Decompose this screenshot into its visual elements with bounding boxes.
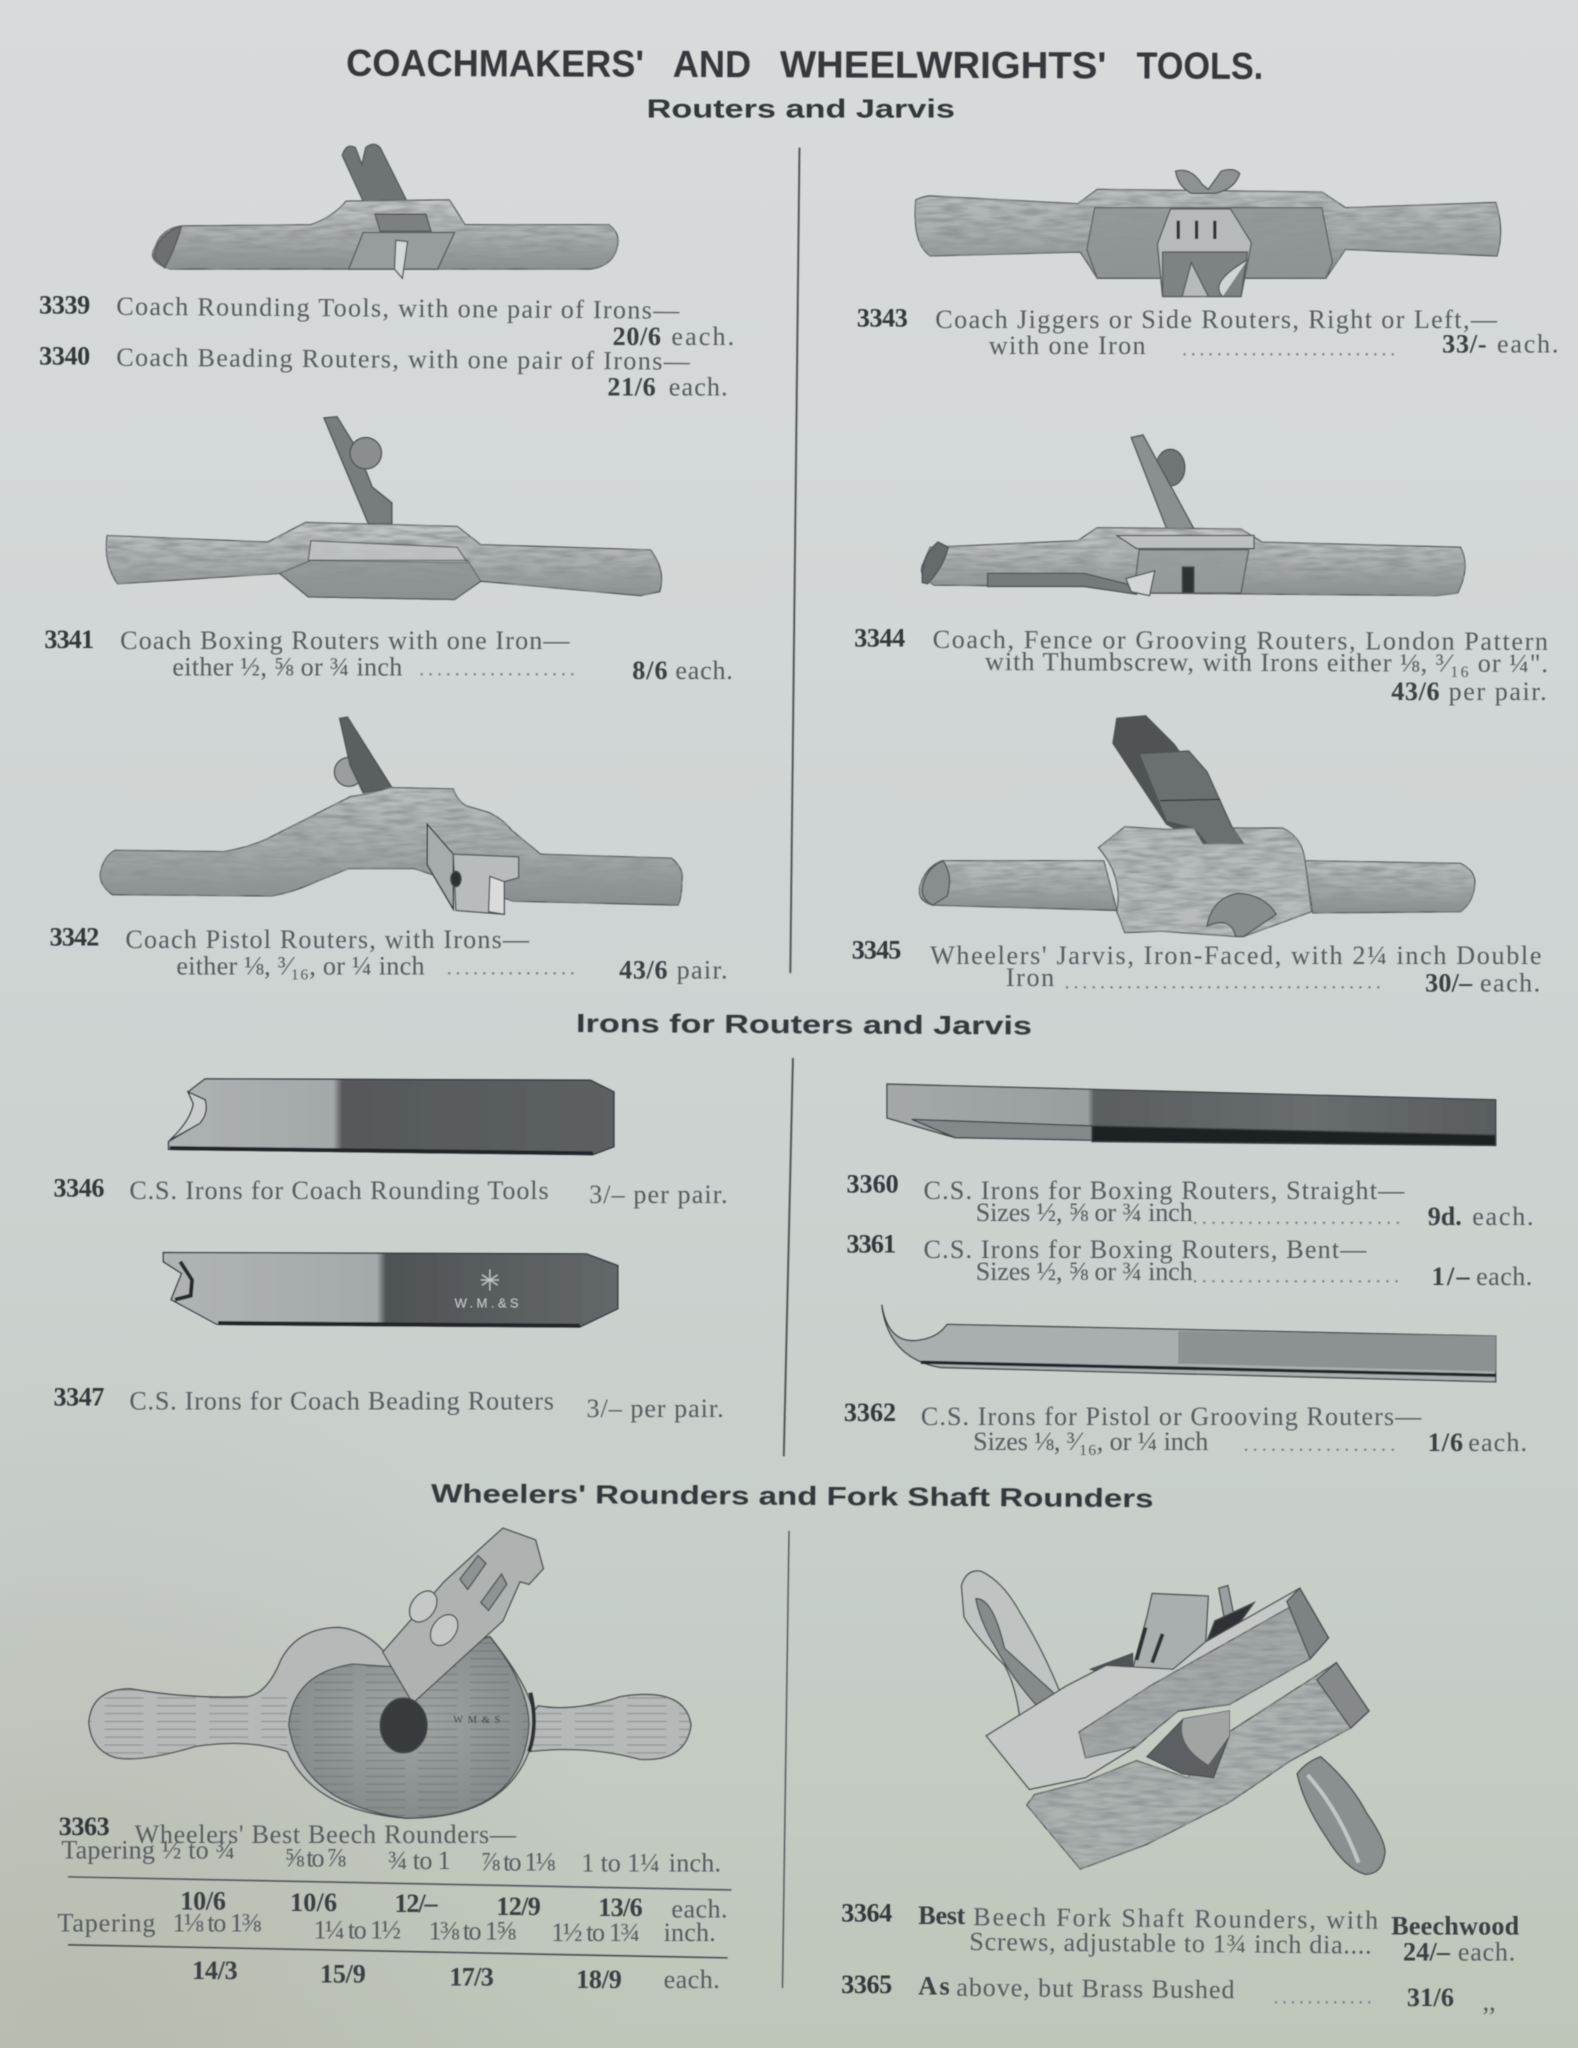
text: 3343: Coach Jiggers or Side Routers, Right or Left,— (935, 305, 1498, 334)
text: 3344: 3344 (854, 624, 905, 653)
text: 3347: 3347 (54, 1382, 105, 1411)
title: AND (673, 44, 751, 86)
panel: routers right column (852, 170, 1558, 997)
illustration: iron 3346 (169, 1079, 614, 1155)
text: 3363 price table: 1 to 1¼ (581, 1849, 660, 1878)
text: 3339: Coach Rounding Tools, with one pair of Irons— (116, 292, 680, 325)
text: 3340: 3340 (39, 341, 90, 370)
text: 3340 (39, 341, 728, 402)
text: 3346: 3346 (54, 1173, 105, 1202)
text: 3347 (54, 1382, 724, 1423)
text: 3341 (44, 625, 733, 685)
illustration: iron 3347: W.M.&S (455, 1295, 519, 1310)
text: 3364: Screws, adjustable to 1¾ inch dia.... (969, 1927, 1372, 1960)
text: 3363 price table: inch. (664, 1918, 716, 1947)
text: 3363 price table: Tapering (57, 1909, 155, 1938)
text: 3341: Coach Boxing Routers with one Iron— (120, 626, 570, 655)
text: 3360: 3360 (846, 1169, 899, 1198)
text: 3363 price table: each. (671, 1894, 728, 1923)
text: 3362 (844, 1398, 1527, 1457)
text: 3363 price table: 17/3 (449, 1962, 494, 1991)
text: 3363 price table: ⅝ to ⅞ (285, 1843, 346, 1872)
text: 3343: ......................... (1182, 339, 1395, 360)
text: 3343: 33/- (1442, 330, 1487, 359)
text: 3342: pair. (677, 955, 728, 984)
illustration: coach boxing router (106, 417, 662, 600)
text: 3365: above, but Brass Bushed (956, 1973, 1235, 2004)
text: 3344: with Thumbscrew, with Irons either ⅛, ³⁄₁₆ or ¼". (985, 647, 1548, 678)
heading: irons: Irons for Routers and Jarvis (576, 1008, 1032, 1040)
text: 3361: C.S. Irons for Boxing Routers, Bent— (924, 1235, 1367, 1264)
text: 3365: As (918, 1971, 950, 2000)
text: 3343 (857, 304, 1558, 360)
title (346, 43, 1263, 88)
panel: routers left column (39, 144, 734, 984)
text: 3364: Beechwood (1391, 1911, 1520, 1940)
text: 3363 price table: 15/9 (320, 1960, 366, 1989)
text: 3365: ............ (1274, 1988, 1372, 2009)
text: 3341: 3341 (44, 625, 94, 654)
text: 3361 (846, 1230, 1532, 1291)
text: 3364: 3364 (841, 1898, 892, 1927)
text: 3363 price table: 1⅜ to 1⅝ (428, 1917, 516, 1946)
illustration: fence router (921, 435, 1465, 596)
text: 3342 (50, 923, 728, 984)
text: 3342: Coach Pistol Routers, with Irons— (125, 925, 530, 954)
text: 3360: 9d. (1428, 1202, 1462, 1231)
text: 3344: 43/6 (1391, 677, 1440, 706)
text: 3342: either ⅛, ³⁄₁₆, or ¼ inch (176, 951, 425, 980)
text: 3346: 3/– per pair. (589, 1180, 728, 1209)
illustration: wheelers rounder (89, 1528, 691, 1818)
illustration: wheelers rounder: WM&S (453, 1715, 500, 1726)
text: 3363 price table: each. (664, 1965, 720, 1994)
text: 3361: 3361 (846, 1230, 896, 1259)
panel: irons left column (54, 1079, 728, 1423)
text: 3365: ,, (1483, 1987, 1496, 2016)
text: 3361: each. (1476, 1262, 1532, 1291)
text: 3364: each. (1458, 1937, 1515, 1966)
illustration: fork shaft rounder (961, 1571, 1385, 1874)
text: 3363 price table: 13/6 (598, 1893, 643, 1922)
text: 3345: Iron (1006, 963, 1054, 992)
text: 3363 price table: ¾ to 1 (388, 1846, 451, 1875)
text: 3345: each. (1480, 968, 1540, 997)
text: 3345: 30/– (1425, 968, 1473, 997)
text: 3339: 3339 (39, 290, 90, 319)
text: 3362: C.S. Irons for Pistol or Grooving Routers— (921, 1402, 1422, 1431)
text: 3363 price table: 10/6 (180, 1887, 226, 1916)
text: 3363 price table: 12/– (394, 1889, 439, 1918)
text: 3361: Sizes ½, ⅝ or ¾ inch (976, 1257, 1193, 1286)
text: 3345: .................................... (1065, 973, 1381, 994)
illustration: iron 3347 (163, 1253, 618, 1327)
text: 3339: 20/6 (613, 322, 661, 351)
illustration: iron 3360 (887, 1084, 1496, 1145)
text: 3364: Best (918, 1901, 966, 1930)
text: 3363 price table: 10/6 (290, 1888, 337, 1917)
text: 3362: ................. (1244, 1435, 1395, 1456)
illustration: wheelers jarvis (919, 716, 1475, 936)
text: 3361: ....................... (1193, 1267, 1399, 1288)
text: 3360: C.S. Irons for Boxing Routers, Straight— (924, 1176, 1405, 1205)
text: 3344: per pair. (1449, 677, 1547, 706)
panel: wheelers rounders (57, 1528, 732, 1994)
text: 3364: Beech Fork Shaft Rounders, with (973, 1902, 1378, 1935)
text: 3364 (841, 1898, 1520, 1966)
text: 3363 price table: inch. (669, 1849, 721, 1878)
title: TOOLS. (1136, 46, 1263, 88)
text: 3363 price table: Wheelers' Best Beech Rounders— (135, 1820, 517, 1849)
text: 3363 price table (57, 1812, 732, 1994)
panel: irons right column (844, 1084, 1534, 1457)
text: 3340: Coach Beading Routers, with one pair of Irons— (116, 343, 691, 376)
text: 3346 (54, 1173, 728, 1209)
text: 3362: 1/6 (1428, 1428, 1463, 1457)
text: 3360 (846, 1169, 1534, 1231)
text: 3360: Sizes ½, ⅝ or ¾ inch (976, 1198, 1193, 1227)
text: 3343: each. (1497, 330, 1558, 359)
text: 3345: 3345 (852, 936, 901, 965)
text: 3362: Sizes ⅛, ³⁄₁₆, or ¼ inch (973, 1427, 1208, 1456)
text: 3347: C.S. Irons for Coach Beading Routers (129, 1386, 554, 1415)
heading: rounders: Wheelers' Rounders and Fork Shaft Rounders (431, 1478, 1154, 1513)
text: 3341: 8/6 (632, 656, 668, 685)
text: 3363 price table: 1⅛ to 1⅜ (172, 1909, 262, 1938)
text: 3363 price table: 1¼ to 1½ (314, 1915, 401, 1944)
text: 3342: 43/6 (619, 955, 668, 984)
text: 3364: 24/– (1403, 1937, 1451, 1966)
text: 3365: 3365 (841, 1970, 892, 1999)
title: COACHMAKERS' (346, 43, 644, 86)
text: 3360: ....................... (1193, 1208, 1400, 1229)
text: 3345: Wheelers' Jarvis, Iron-Faced, with 2¼ inch Double (930, 941, 1541, 970)
text: 3343: 3343 (857, 304, 908, 333)
text: 3347: 3/– per pair. (587, 1394, 724, 1423)
text: 3340: 21/6 (607, 373, 656, 402)
text: 3363 price table: 1½ to 1¾ (551, 1918, 640, 1947)
text: 3363 price table: 3363 (59, 1812, 110, 1841)
text: 3341: .................. (419, 659, 575, 680)
text: 3363 price table: 12/9 (496, 1892, 541, 1921)
text: 3365: 31/6 (1407, 1983, 1454, 2012)
text: 3362: each. (1468, 1428, 1527, 1457)
text: 3360: each. (1472, 1202, 1534, 1231)
panel: fork shaft rounders (841, 1571, 1520, 2016)
heading: routers and jarvis: Routers and Jarvis (647, 94, 955, 124)
illustration: coach jigger (915, 170, 1501, 296)
text: 3342: ............... (447, 958, 575, 979)
text: 3344 (854, 624, 1548, 706)
text: 3363 price table: 14/3 (192, 1956, 238, 1985)
text: 3365 (841, 1970, 1496, 2016)
text: 3341: either ½, ⅝ or ¾ inch (172, 652, 402, 681)
illustration: coach pistol router (100, 717, 682, 914)
text: 3344: Coach, Fence or Grooving Routers, London Pattern (933, 625, 1548, 656)
text: 3363 price table: 18/9 (576, 1965, 622, 1994)
text: 3342: 3342 (50, 923, 99, 952)
text: 3341: each. (675, 656, 733, 685)
text: 3346: C.S. Irons for Coach Rounding Tools (129, 1176, 549, 1205)
text: 3362: 3362 (844, 1398, 896, 1427)
text: 3339: each. (671, 322, 734, 351)
illustration: iron 3362 (882, 1305, 1496, 1382)
text: 3363 price table: ⅞ to 1⅛ (481, 1847, 556, 1876)
text: 3343: with one Iron (989, 331, 1146, 360)
text: 3339 (39, 290, 734, 351)
illustration: coach rounding tool (153, 144, 618, 278)
text: 3361: 1/– (1432, 1262, 1471, 1291)
text: 3340: each. (669, 373, 728, 402)
text: 3345 (852, 936, 1541, 997)
title: WHEELWRIGHTS' (780, 44, 1107, 87)
text: 3363 price table: Tapering ½ to ¾ (61, 1836, 235, 1865)
